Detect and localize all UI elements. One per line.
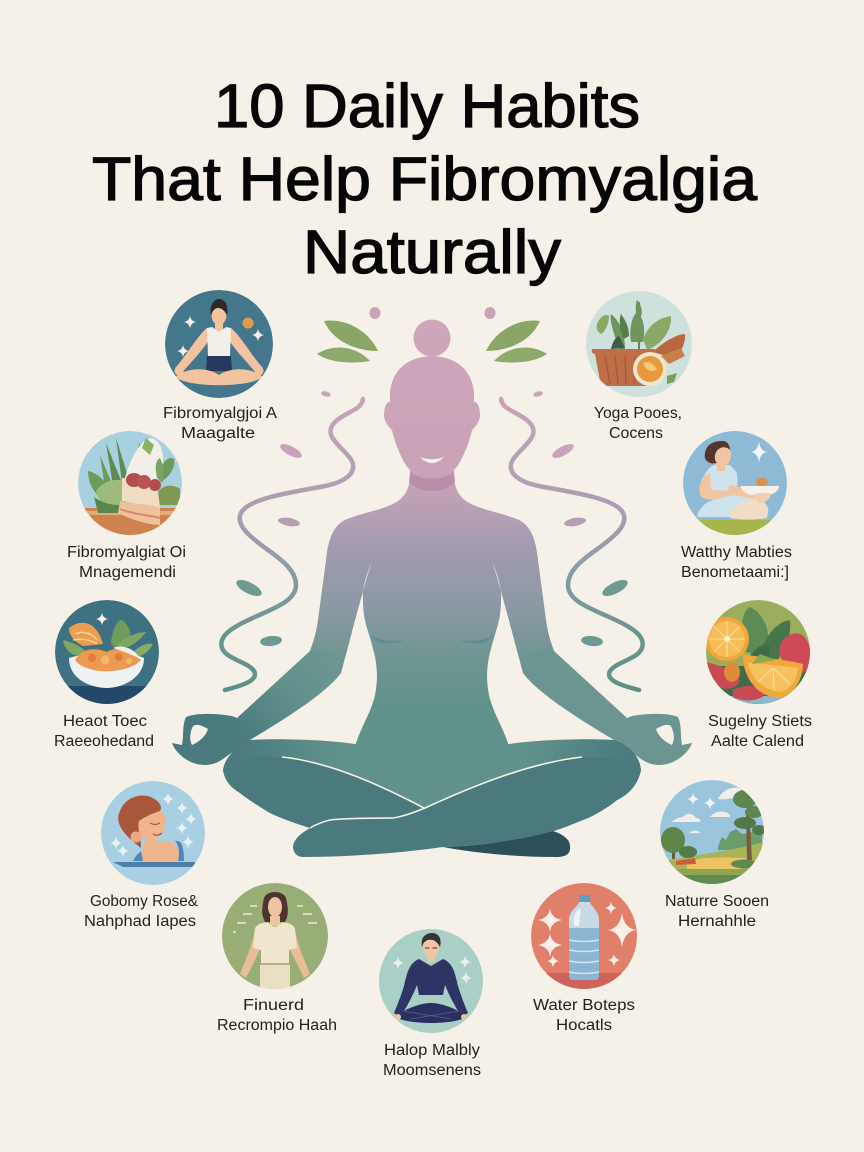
label: Yoga Pooes, xyxy=(594,405,682,422)
icon: herb pot with citrus slice xyxy=(586,291,692,397)
title: Naturally xyxy=(303,218,562,286)
title: That Help Fibromyalgia xyxy=(92,145,757,213)
icon: landscape with trees xyxy=(660,780,766,884)
habit: herbal remedies xyxy=(586,291,692,442)
label: Heaot Toec xyxy=(63,713,147,730)
flowing energy wisps xyxy=(221,399,643,690)
label: Moomsenens xyxy=(383,1062,481,1079)
label: Water Boteps xyxy=(533,997,635,1014)
habit: meditation xyxy=(163,290,278,442)
label: Sugelny Stiets xyxy=(708,713,812,730)
label xyxy=(681,544,792,581)
title: 10 Daily Habits xyxy=(214,72,640,140)
icon: sleeping person xyxy=(101,781,205,885)
label: Nahphad Iapes xyxy=(84,913,196,930)
label xyxy=(54,713,154,750)
icon: woman holding a bowl xyxy=(683,431,787,541)
habit: time in nature xyxy=(660,780,769,930)
label: Aalte Calend xyxy=(711,733,804,750)
label xyxy=(708,713,812,750)
icon: vegetables and food stack xyxy=(78,431,182,538)
label: Naturre Sooen xyxy=(665,893,769,910)
head and upper body xyxy=(300,320,564,780)
habit: balanced meals xyxy=(54,600,159,750)
label xyxy=(163,405,278,442)
label: Fibromyalgjoi A xyxy=(163,405,278,422)
title xyxy=(92,72,757,286)
label: Benometaami:] xyxy=(681,564,789,581)
habit: gentle stretching xyxy=(217,883,337,1034)
label: Finuerd xyxy=(243,997,304,1014)
habit: fresh fruit xyxy=(705,600,812,750)
decorative leaves and dots above head xyxy=(317,307,547,363)
icon: citrus fruit and leaves xyxy=(705,600,811,710)
label: Raeeohedand xyxy=(54,733,154,750)
habit: restful sleep xyxy=(84,781,205,930)
label xyxy=(383,1042,481,1079)
icon: seated yoga pose xyxy=(165,290,273,398)
gaps between arms and torso xyxy=(250,560,614,746)
habit: hydration xyxy=(531,883,637,1034)
label: Hocatls xyxy=(556,1017,612,1034)
label: Gobomy Rose& xyxy=(90,893,199,910)
habit: mindfulness xyxy=(378,928,484,1079)
central meditating figure xyxy=(172,307,692,857)
label: Recrompio Haah xyxy=(217,1017,337,1034)
label xyxy=(665,893,769,930)
label xyxy=(67,544,186,581)
label xyxy=(533,997,635,1034)
habit: mindful eating xyxy=(681,431,792,581)
label: Maagalte xyxy=(181,425,255,442)
label: Halop Malbly xyxy=(384,1042,480,1059)
icon: meditating man in navy xyxy=(378,928,484,1034)
label: Cocens xyxy=(609,425,663,442)
label: Hernahhle xyxy=(678,913,756,930)
label xyxy=(84,893,199,930)
arms and hands xyxy=(172,649,692,765)
label: Mnagemendi xyxy=(79,564,176,581)
label: Fibromyalgiat Oi xyxy=(67,544,186,561)
icon: food bowl and leaves xyxy=(55,600,159,710)
face details xyxy=(370,457,494,644)
label xyxy=(217,997,337,1034)
label: Watthy Mabties xyxy=(681,544,792,561)
label xyxy=(594,405,682,442)
habit: whole foods xyxy=(67,431,186,581)
icon: water bottle xyxy=(531,883,637,994)
crossed legs xyxy=(223,739,641,857)
icon: standing woman xyxy=(222,883,328,992)
floating petals xyxy=(234,390,630,647)
